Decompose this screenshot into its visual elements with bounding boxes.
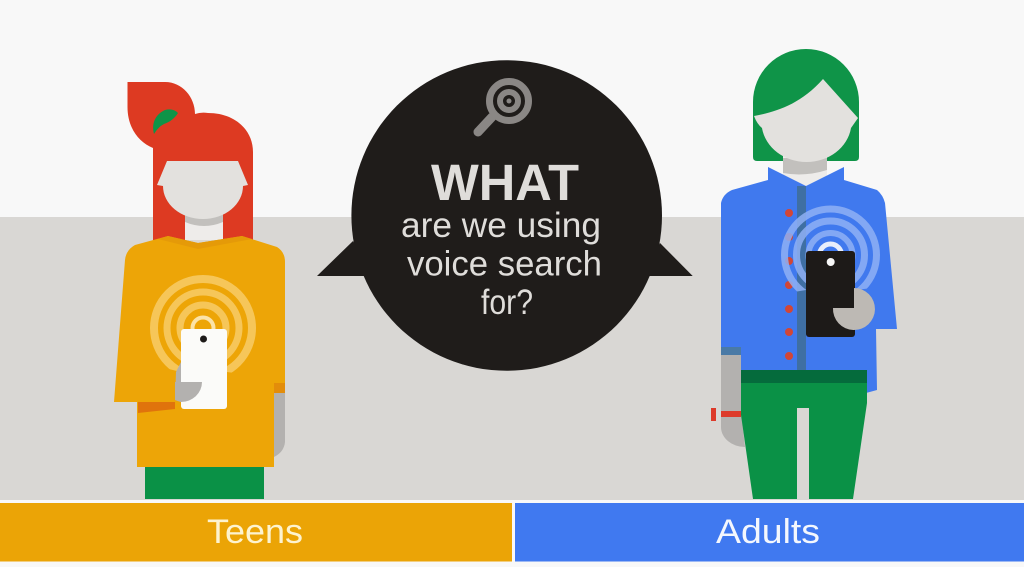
teen neck bbox=[185, 205, 223, 240]
adult green pants bbox=[741, 383, 867, 499]
adult pants waistband bbox=[741, 370, 867, 383]
teens label bar bbox=[0, 503, 512, 562]
teen collar shading bbox=[158, 236, 252, 249]
teen green pants bbox=[145, 467, 264, 499]
teens label: Teens bbox=[207, 513, 303, 551]
adult neck bbox=[783, 155, 827, 186]
adult phone camera dot bbox=[827, 258, 835, 266]
adult face bbox=[754, 79, 858, 162]
adult figure bbox=[711, 49, 897, 499]
adult hand bbox=[833, 288, 875, 330]
adult blue shirt bbox=[721, 167, 897, 393]
adult watch strap bbox=[721, 411, 741, 417]
speech bubble bbox=[317, 60, 693, 371]
teen arm bbox=[274, 393, 285, 457]
bubble line: are we using: are we using bbox=[401, 206, 601, 245]
teen signal rings bbox=[154, 279, 252, 377]
teen cuff bbox=[274, 383, 285, 393]
adult shirt buttons bbox=[785, 209, 793, 360]
adult arm bbox=[721, 355, 745, 447]
bubble heading WHAT: WHAT bbox=[431, 154, 579, 211]
teen sleeve fold bbox=[138, 402, 175, 413]
bubble line: voice search: voice search bbox=[407, 244, 602, 284]
teen hair tie bbox=[153, 109, 178, 134]
bubble left tail bbox=[317, 241, 375, 276]
adult black phone bbox=[806, 251, 855, 337]
teen phone camera dot bbox=[200, 336, 207, 342]
teen face bbox=[157, 161, 248, 219]
icon: magnifying glass bbox=[478, 82, 528, 132]
bubble body bbox=[351, 60, 662, 371]
bubble right tail bbox=[640, 243, 693, 276]
adults label bar bbox=[515, 503, 1024, 562]
bubble line: for?: for? bbox=[481, 283, 533, 322]
teen thumb bbox=[175, 382, 202, 402]
teen white phone bbox=[181, 329, 227, 409]
adult watch mark bbox=[711, 408, 716, 421]
teen hair and ponytail bbox=[128, 82, 253, 240]
teen hand back bbox=[175, 362, 181, 402]
teen figure bbox=[114, 82, 285, 499]
adult green hair bbox=[753, 49, 859, 161]
teen orange shirt bbox=[114, 236, 285, 467]
adult shirt placket bbox=[797, 186, 806, 370]
adult cuff bbox=[721, 347, 741, 355]
adult signal rings bbox=[784, 209, 876, 301]
adults label: Adults bbox=[716, 513, 820, 551]
